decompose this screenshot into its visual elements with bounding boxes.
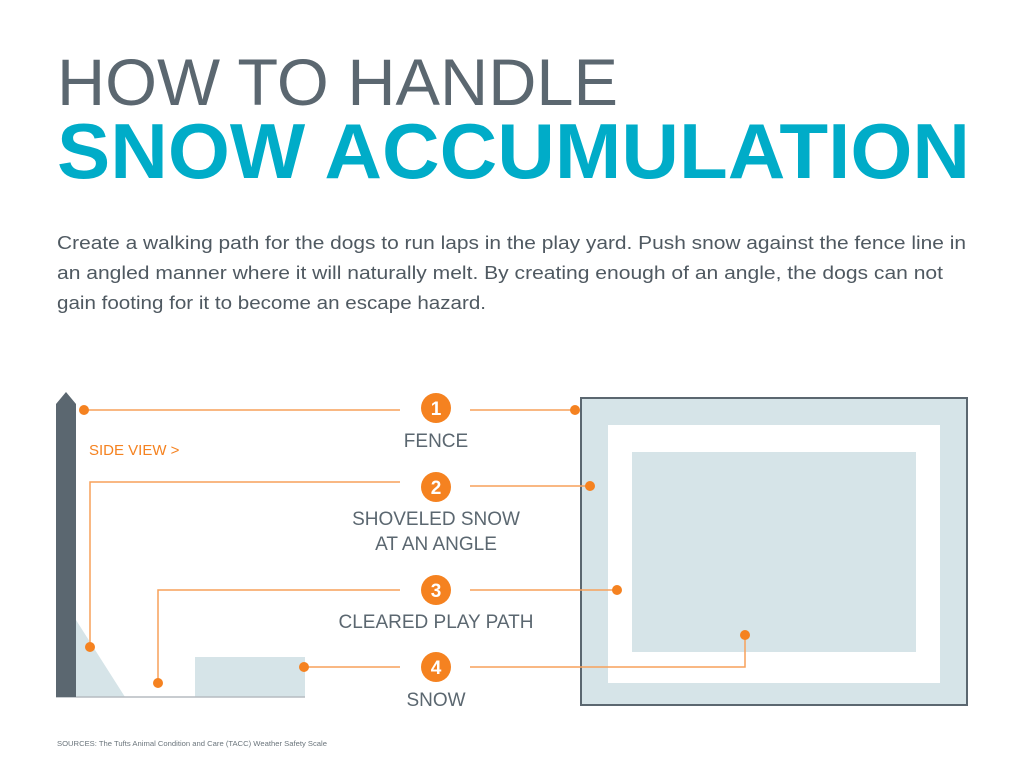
step 2: shoveled snow: 2: [431, 478, 441, 499]
intro paragraph: an angled manner where it will naturally melt. By creating enough of an angle, the dogs can not: [57, 262, 943, 283]
step 4: snow: SNOW: [406, 690, 466, 711]
step 4: snow: [406, 652, 466, 711]
step 2: shoveled snow: [352, 472, 520, 555]
ground line: [56, 696, 305, 698]
connector dots: [79, 405, 750, 688]
step 4: snow: 4: [431, 658, 442, 679]
intro paragraph: [57, 232, 966, 313]
step 1: fence: 1: [431, 399, 442, 420]
step 2: shoveled snow: AT AN ANGLE: [375, 534, 497, 555]
sources: SOURCES: The Tufts Animal Condition and Care (TACC) Weather Safety Scale: [57, 739, 327, 748]
intro paragraph: gain footing for it to become an escape hazard.: [57, 292, 486, 313]
connector lines: [84, 410, 745, 683]
step 1: fence: FENCE: [404, 431, 468, 452]
title line 1: HOW TO HANDLE: [57, 45, 618, 119]
top view diagram: [581, 398, 967, 705]
step 3: cleared play path: CLEARED PLAY PATH: [338, 612, 534, 633]
step 1: fence: [404, 393, 468, 452]
fence post: [56, 392, 76, 697]
step 3: cleared play path: [338, 575, 534, 633]
step 2: shoveled snow: SHOVELED SNOW: [352, 509, 520, 530]
side view diagram: [56, 392, 305, 697]
step 3: cleared play path: 3: [431, 581, 441, 602]
snow slope: [76, 620, 125, 697]
intro paragraph: Create a walking path for the dogs to run laps in the play yard. Push snow against the fence line in: [57, 232, 966, 253]
title line 2: SNOW ACCUMULATION: [57, 107, 970, 195]
snow block: [195, 657, 305, 697]
side view label: SIDE VIEW >: [89, 442, 180, 459]
